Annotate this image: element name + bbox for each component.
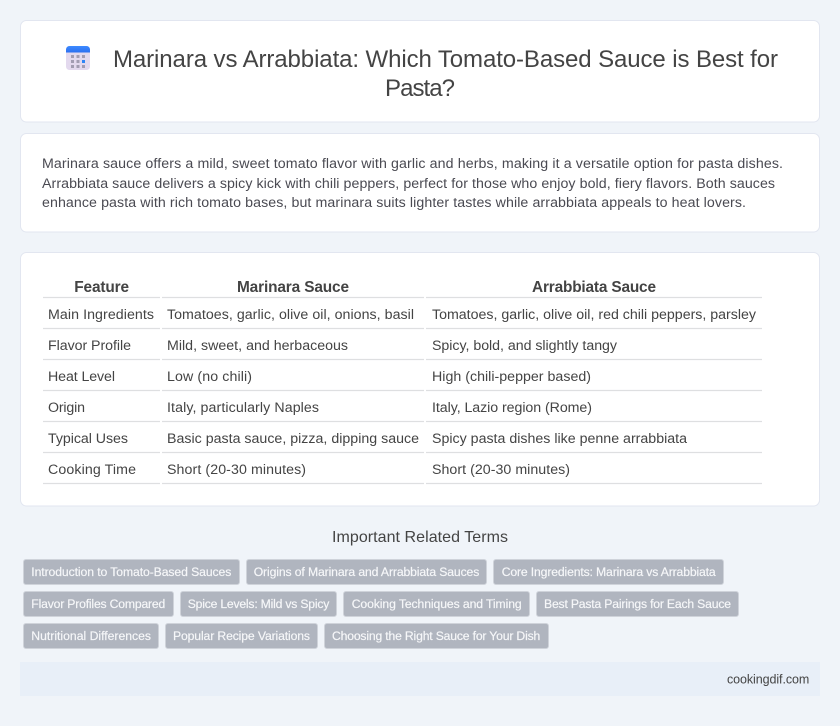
row: heat level: High (chili-pepper based) <box>432 369 591 385</box>
row: main ingredients <box>48 307 757 323</box>
row: flavor profile <box>48 338 618 354</box>
title <box>113 46 778 102</box>
tag: Choosing the Right Sauce for Your Dish <box>332 629 540 643</box>
row: heat level: Low (no chili) <box>167 369 252 385</box>
related term tags <box>24 560 738 648</box>
heading: important related terms: Important Related Terms <box>332 529 508 546</box>
table header row: Marinara Sauce <box>237 279 349 296</box>
row: heat level <box>48 369 591 385</box>
row: cooking time <box>48 462 570 478</box>
row: origin: Italy, Lazio region (Rome) <box>432 400 592 416</box>
tag <box>494 560 724 584</box>
tag <box>166 624 318 648</box>
row: cooking time: Short (20-30 minutes) <box>167 462 306 478</box>
tag <box>536 592 738 616</box>
title: Pasta? <box>385 75 455 102</box>
tag: Core Ingredients: Marinara vs Arrabbiata <box>502 565 716 579</box>
row: origin: Origin <box>48 400 85 416</box>
tag: Flavor Profiles Compared <box>31 597 165 611</box>
table header row <box>74 279 656 296</box>
row: cooking time: Short (20-30 minutes) <box>432 462 570 478</box>
table header row: Arrabbiata Sauce <box>532 279 656 296</box>
title: Marinara vs Arrabbiata: Which Tomato-Based Sauce is Best for <box>113 46 778 73</box>
tag <box>24 624 158 648</box>
tag: Popular Recipe Variations <box>173 629 310 643</box>
row: heat level: Heat Level <box>48 369 115 385</box>
panel: introduction text <box>20 134 820 232</box>
row: main ingredients: Main Ingredients <box>48 307 154 323</box>
panel: introduction text: Marinara sauce offers a mild, sweet tomato flavor with garlic and herbs, making it a versatile option for pasta dishes. <box>42 156 783 172</box>
row: main ingredients: Tomatoes, garlic, olive oil, onions, basil <box>167 307 414 323</box>
row: flavor profile: Spicy, bold, and slightly tangy <box>432 338 618 354</box>
row: typical uses <box>48 431 687 447</box>
tag: Best Pasta Pairings for Each Sauce <box>544 597 731 611</box>
tag <box>24 560 240 584</box>
tag: Origins of Marinara and Arrabbiata Sauces <box>254 565 479 579</box>
panel: introduction text: enhance pasta with rich tomato bases, but marinara suits lighter tastes while arrabbiata appeals to heat lovers. <box>42 195 746 211</box>
tag <box>246 560 486 584</box>
tag: Cooking Techniques and Timing <box>352 597 522 611</box>
tag: Spice Levels: Mild vs Spicy <box>188 597 330 611</box>
tag <box>24 592 174 616</box>
tag <box>324 624 548 648</box>
row: origin: Italy, particularly Naples <box>167 400 319 416</box>
tag <box>180 592 336 616</box>
row: typical uses: Typical Uses <box>48 431 128 447</box>
panel: comparison table <box>20 252 820 506</box>
row: origin <box>48 400 592 416</box>
tag: Introduction to Tomato-Based Sauces <box>31 565 231 579</box>
tag: Nutritional Differences <box>31 629 151 643</box>
row: typical uses: Spicy pasta dishes like penne arrabbiata <box>432 431 687 447</box>
panel: title header <box>20 20 820 122</box>
row: main ingredients: Tomatoes, garlic, olive oil, red chili peppers, parsley <box>432 307 757 323</box>
row: typical uses: Basic pasta sauce, pizza, dipping sauce <box>167 431 419 447</box>
panel: introduction text: Arrabbiata sauce delivers a spicy kick with chili peppers, perfect for those who enjoy bold, fiery flavors. Both sauces <box>42 176 775 192</box>
table header row: Feature <box>74 279 129 296</box>
footer <box>20 662 820 696</box>
tag <box>344 592 530 616</box>
footer: cookingdif.com <box>727 672 809 686</box>
icon: calendar <box>66 46 90 70</box>
row: flavor profile: Mild, sweet, and herbaceous <box>167 338 348 354</box>
row: cooking time: Cooking Time <box>48 462 136 478</box>
row: flavor profile: Flavor Profile <box>48 338 131 354</box>
